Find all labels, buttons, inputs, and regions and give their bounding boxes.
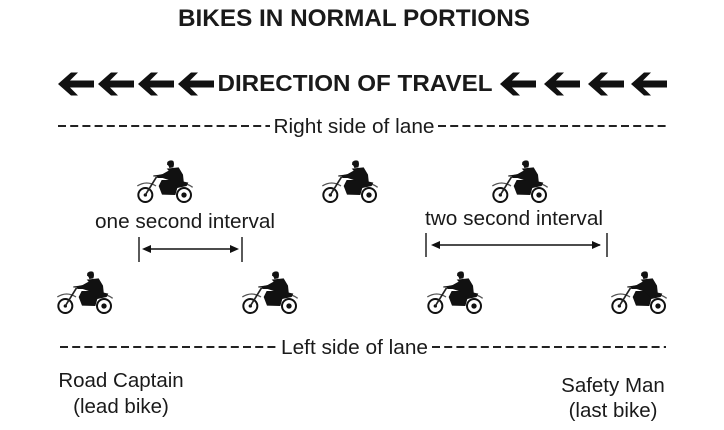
direction of travel banner [58,70,667,96]
bottom row bikes [57,271,667,313]
label: one second interval: one second interval [95,211,275,233]
arrows: left group [58,72,214,96]
icon: motorcycle 3 [492,160,548,202]
label: left side of lane: Left side of lane [281,336,428,359]
heading: direction of travel: DIRECTION OF TRAVEL [218,70,492,96]
title: BIKES IN NORMAL PORTIONS [178,5,530,32]
top row bikes [137,160,548,202]
icon: motorcycle 5 [242,271,298,313]
one second interval callout [95,211,275,262]
icon: motorcycle 4 [57,271,113,313]
arrows: right group [500,72,667,96]
label: road captain: Road Captain [58,369,184,392]
icon: motorcycle 7 [611,271,667,313]
label: right side of lane: Right side of lane [274,115,434,138]
two second interval callout [425,208,607,257]
icon: motorcycle 1 [137,160,193,202]
label: two second interval: two second interval [425,208,603,230]
label: road captain: (lead bike) [73,395,169,418]
icon: motorcycle 2 [322,160,378,202]
label: safety man: Safety Man [561,374,665,397]
icon: motorcycle 6 [427,271,483,313]
label: safety man: (last bike) [569,399,657,422]
